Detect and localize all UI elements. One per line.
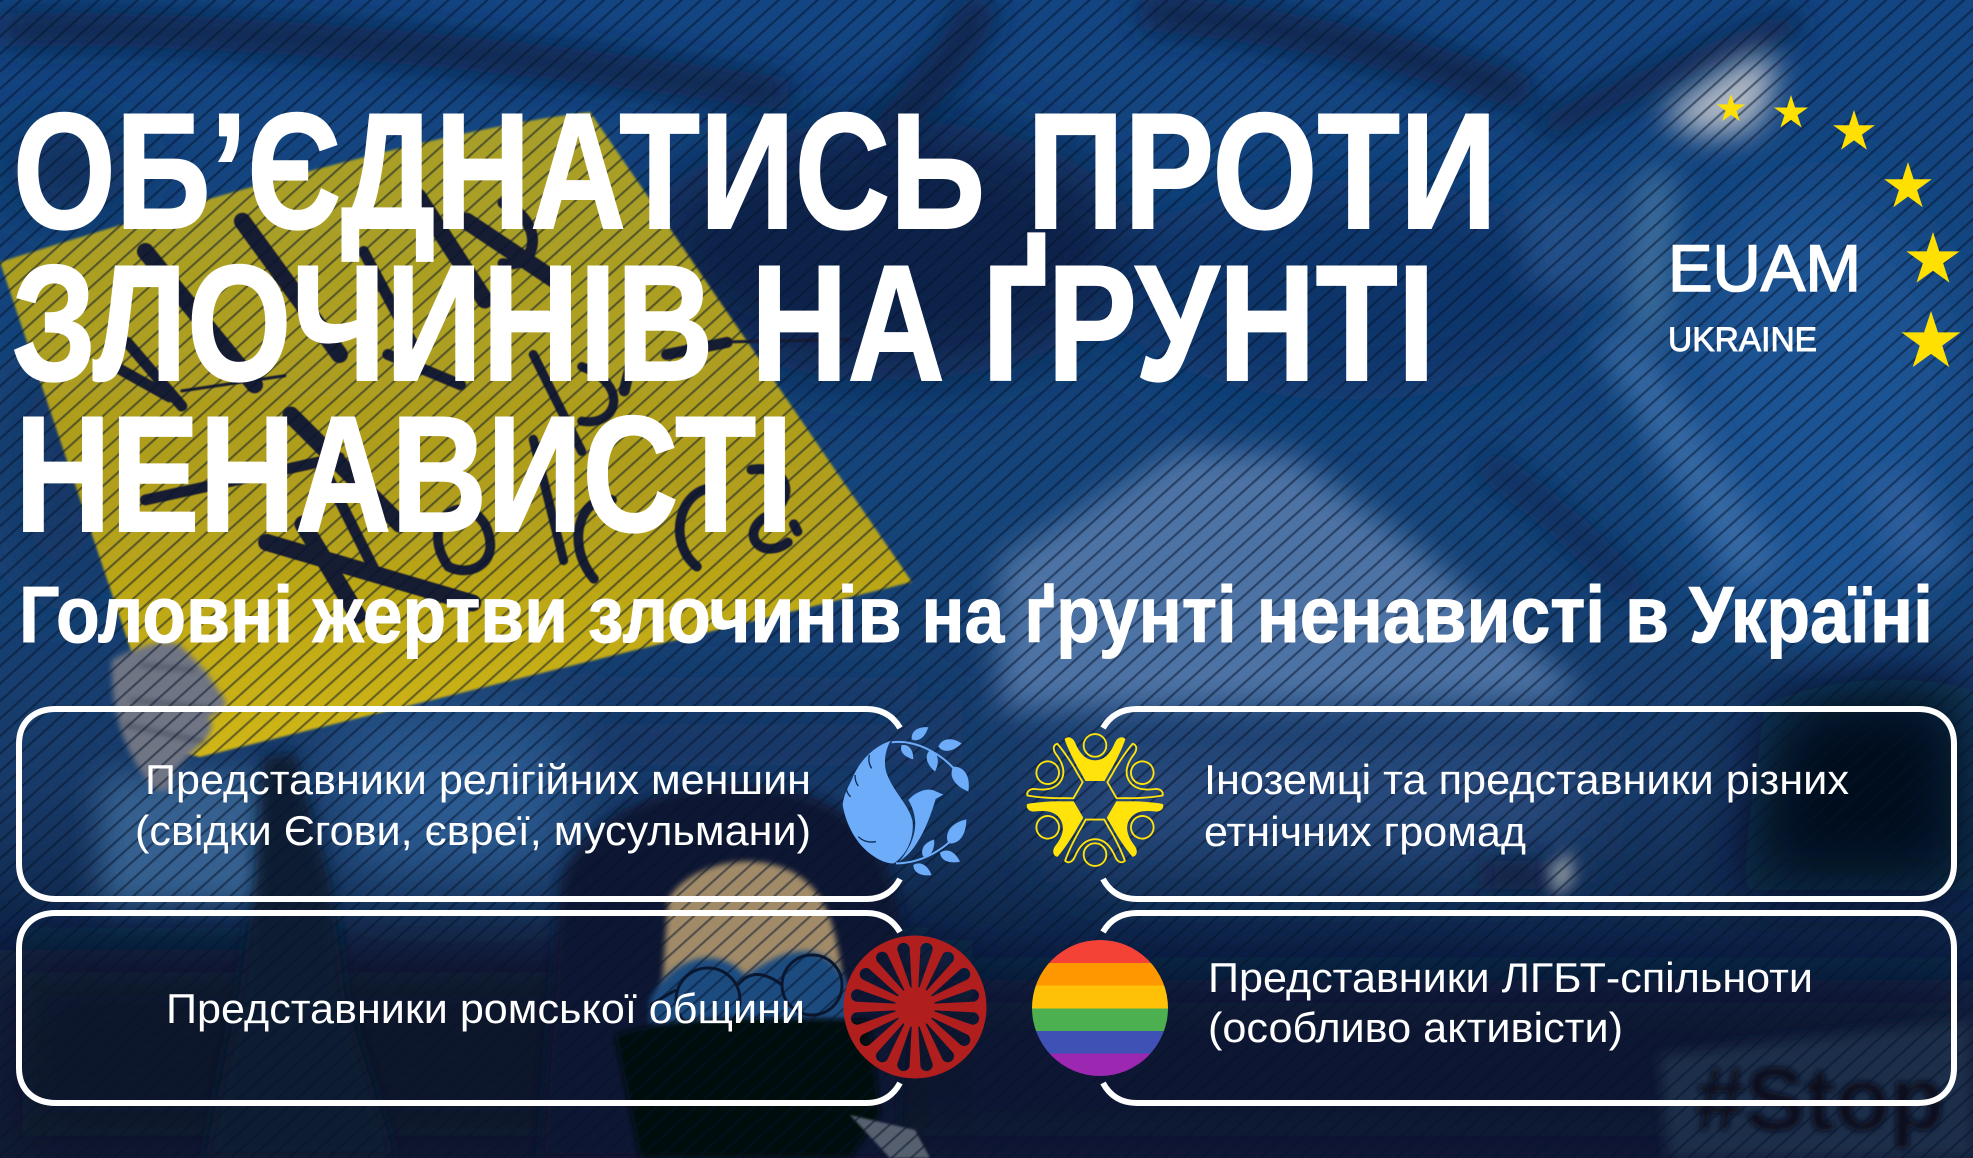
panel: religious minorities: (свідки Єгови, євреї, мусульмани)	[135, 807, 811, 854]
icon: Roma chakra wheel	[843, 935, 987, 1079]
title: ЗЛОЧИНІВ НА ҐРУНТІ	[12, 231, 1435, 415]
title	[12, 79, 1497, 566]
panel: foreigners and ethnic communities: Іноземці та представники різних	[1204, 756, 1849, 803]
logo wordmark	[1668, 231, 1861, 359]
logo wordmark: UKRAINE	[1668, 321, 1817, 359]
photo: yellow protest sign with handwritten slogan	[0, 112, 912, 757]
panel: LGBT community: Представники ЛГБТ-спільноти	[1208, 954, 1813, 1001]
photo: blurred "#Stop" placard, bottom right	[1660, 1020, 1973, 1158]
panel: foreigners and ethnic communities	[1103, 709, 1954, 899]
photo: raised hand holding the sign	[112, 642, 226, 790]
photo: protester's dark sleeve, hair, glasses and mask	[205, 752, 930, 1158]
logo: EUAM Ukraine with EU star arc	[1668, 94, 1960, 367]
panel: religious minorities	[19, 709, 900, 899]
title: НЕНАВИСТІ	[15, 382, 793, 566]
icon: peace dove with olive branches	[843, 723, 975, 879]
title: ОБ’ЄДНАТИСЬ	[13, 79, 985, 263]
icon: ring of six people	[1023, 734, 1167, 866]
panel: LGBT community	[1103, 913, 1954, 1103]
photo: blurred "#Stop" placard, bottom right: #Stop	[1695, 1050, 1945, 1150]
title: ПРОТИ	[1027, 79, 1497, 263]
logo wordmark: EUAM	[1668, 231, 1861, 305]
panel: Roma community: Представники ромської общини	[166, 985, 805, 1032]
panel: LGBT community: (особливо активісти)	[1208, 1004, 1623, 1051]
icon: rainbow circle	[1030, 940, 1170, 1076]
logo stars	[1717, 94, 1960, 367]
panel: Roma community	[19, 913, 900, 1103]
panel: foreigners and ethnic communities: етнічних громад	[1204, 808, 1526, 855]
panel: religious minorities: Представники релігійних меншин	[145, 756, 811, 803]
